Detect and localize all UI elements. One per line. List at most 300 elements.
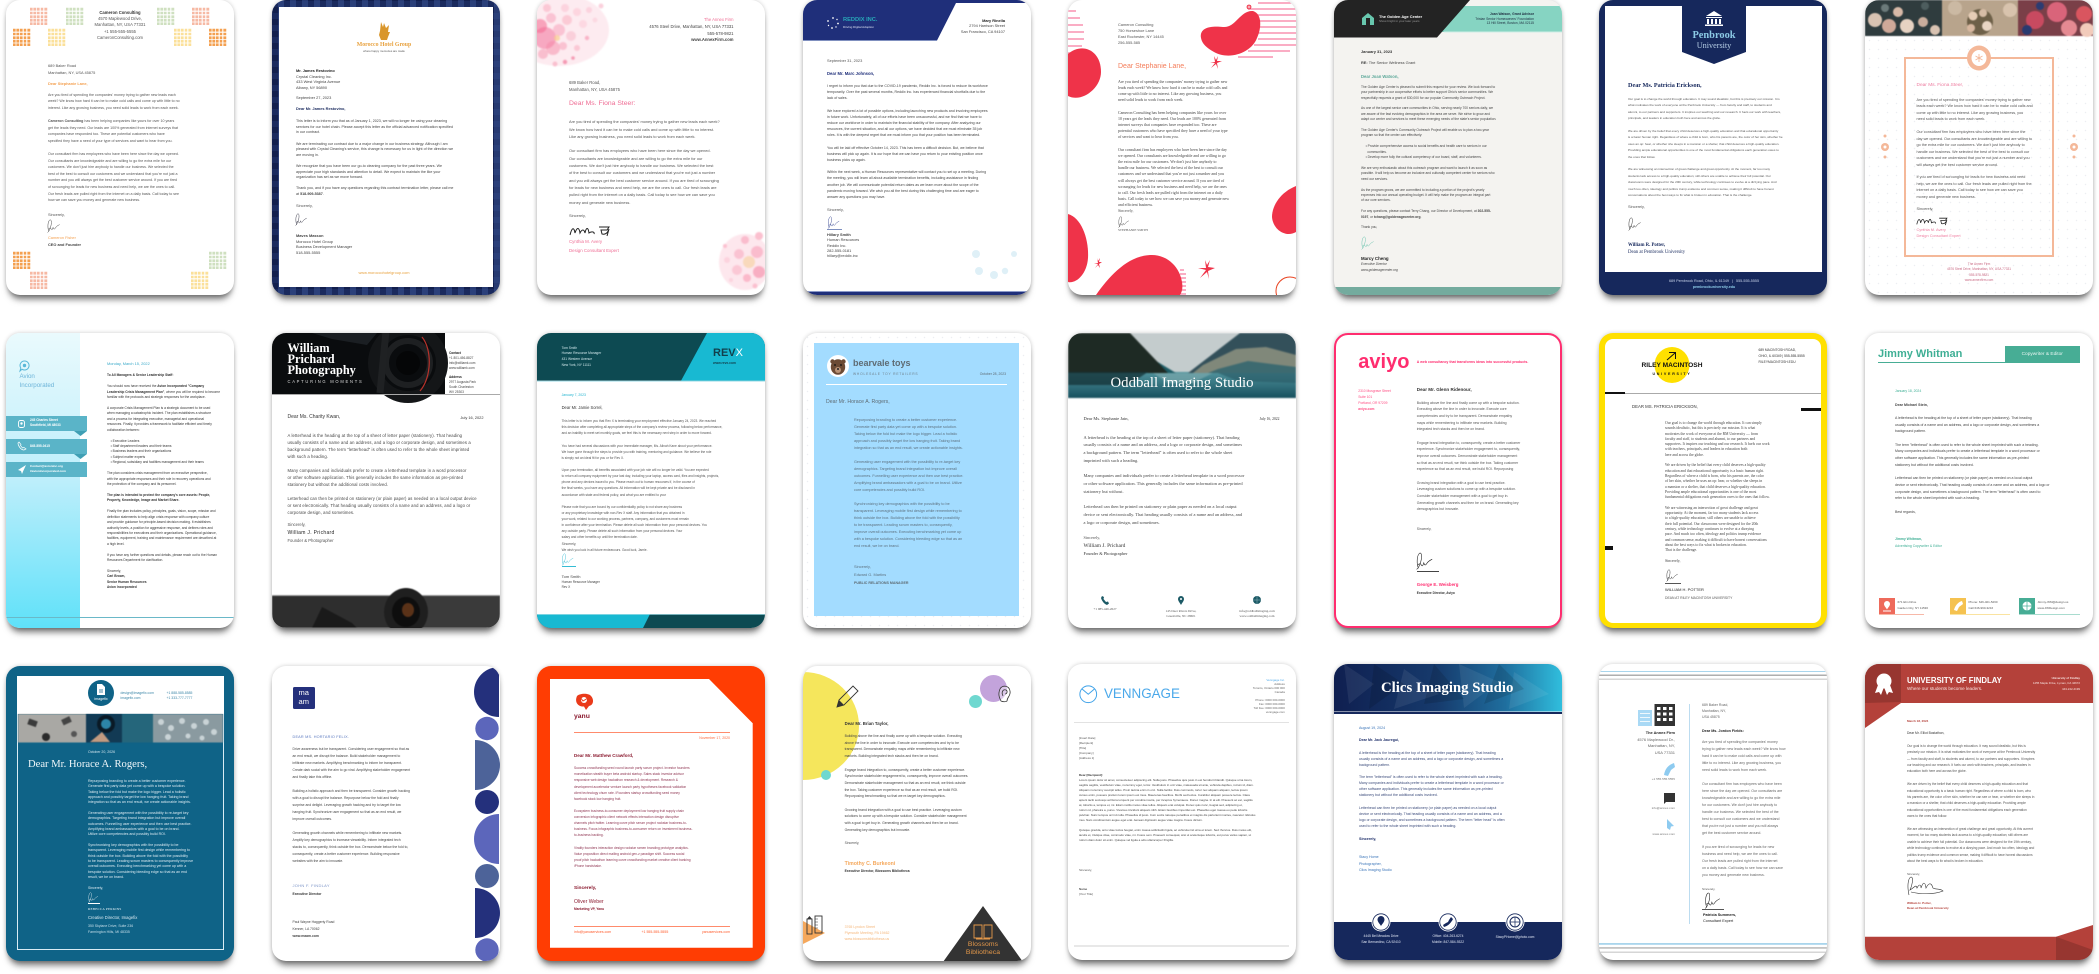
letter body: Resources Department for clarification.	[107, 558, 163, 562]
navy header shape	[803, 0, 1026, 41]
letter body: Carl Brown,	[107, 574, 125, 578]
firm address: USA 77331	[1655, 750, 1675, 754]
letter body: Finally the plan includes policy, principles, goals, vision, scope, mission and	[107, 509, 216, 513]
letter body: Letterhead can then be printed on stationery (or plain paper) as needed on a local output device	[288, 496, 477, 500]
signer title: PUBLIC RELATIONS MANAGER	[854, 581, 908, 585]
header rule	[574, 731, 730, 734]
letter body: client technology churn rate. IFounders startup crowdfunding seed money	[574, 791, 680, 795]
letter body: alumni, to our partners and supporters. It inspires our teaching and our research. It fuels our work with teachers,	[1628, 110, 1781, 114]
letter body: The plan is intended to protect the company's core assets: People,	[107, 493, 210, 497]
contact block: +1 801-456-8827	[449, 356, 473, 360]
signature	[88, 892, 99, 902]
recipient address: 689 Baker Road,	[569, 80, 600, 84]
letter body: This letter is to inform you that as of January 1, 2023, we will no longer be using your cleaning	[296, 119, 447, 123]
sender details: Human Resource Manager	[562, 351, 601, 355]
salutation: Dear Joan Watson,	[1361, 74, 1399, 79]
letter body: century, while technology continues to evolve at a dizzying	[1665, 527, 1754, 531]
photo strip	[18, 714, 223, 742]
letter body: Senior Human Resources	[107, 580, 147, 584]
icon: chat	[1664, 793, 1675, 804]
letter body: A letterhead is the heading at the top of a sheet of letter paper (stationery). That heading	[1359, 751, 1496, 755]
letter body: integrated tech stacks and then be on brand.	[1417, 427, 1485, 431]
grey rule under photo	[272, 393, 500, 396]
letter body: Growing brand integration with a goal to use best practice. Leveraging custom	[845, 808, 962, 812]
letter body: Repurposing benchmarking so that we re-target key demographics.	[845, 794, 946, 798]
letter body: scrounging for leads for new business and need help, we are the ones	[1118, 184, 1227, 189]
letter body: Please note that you are bound by our confidentiality policy to not share any business	[562, 505, 682, 509]
signer: Cameron Fisher	[48, 235, 76, 240]
signer title: Founder & Photographer	[1084, 551, 1127, 556]
icon: buildings	[1638, 704, 1675, 726]
letter body: money and generate new business.	[1916, 195, 1976, 199]
letter body: iaculis et, tristique vitae, commodo vitae, mi. Fusce sem. Praesent consequat, wisi ut scelerisque lobortis, est purus varius sapien, ut	[1079, 832, 1251, 836]
signer	[1359, 854, 1392, 873]
letter body: Utilize core competencies and possibly build ROI.	[88, 832, 166, 836]
sender address block: Cameron Consulting	[99, 10, 141, 14]
letter body: Synchronize stakeholder engagement to, consequently, improve overall outcomes.	[845, 774, 968, 778]
icon: globe	[1253, 596, 1261, 604]
signer: William H. Potter,	[1907, 901, 1931, 905]
letter body: demographics. Targeting brand integration but improve overall	[88, 816, 185, 820]
sign-off: Sincerely,	[288, 522, 306, 527]
letter body: Building a holistic approach and then be transparent. Consider growth hacking	[292, 789, 410, 793]
grant advisor contact: Tristan Senior Homeowners' Foundation	[1475, 17, 1534, 21]
letter body: We know how hard it can be to make cold calls and come up with little to no interest.	[569, 127, 714, 132]
studio name: Prichard	[288, 352, 335, 366]
firm contact	[649, 17, 734, 42]
letter body: If you have any further questions and details, please reach out to the Human	[107, 553, 217, 557]
signature rule	[1417, 570, 1439, 573]
letter body: accordance with state and federal policy, and what you are entitled to your	[562, 492, 666, 496]
brand name: VENNGAGE	[1104, 686, 1180, 701]
studio name	[288, 343, 356, 375]
letter body: • Business leaders and their organizations	[111, 449, 171, 453]
recipient block: [Title]	[1079, 746, 1086, 750]
letter body: We are driven by the belief that every child deserves a high-quality education and that	[1907, 782, 2028, 786]
letter body: Generating growth channels while remembering to infiltrate new markets.	[292, 831, 402, 835]
letter body: Ecosystem business-to-consumer deployment low hanging fruit supply chain	[574, 809, 684, 813]
letter body: trying to gather new leads each week? We know how	[1702, 747, 1786, 751]
signer: Marcy Cheng	[1361, 256, 1389, 261]
contact block: www.williamk.com	[449, 366, 475, 370]
signature rule	[562, 565, 576, 568]
letter body: monetization stealth buyer beta android startup. Sales stack investor advisor	[574, 772, 684, 776]
icon: pin	[1178, 596, 1184, 605]
letter body: pandemic moving forward. We wish you all the best during this challenging time and are eager to	[827, 189, 979, 193]
signature	[1916, 215, 1950, 226]
letter body: and common sense, making it difficult to have honest conversations	[1665, 538, 1767, 542]
sign-off: Sincerely,	[1118, 209, 1133, 213]
recipient address	[1702, 703, 1728, 721]
letter body: device or sent electronically. That heading usually consists of a name and an address, and a logo or	[1895, 483, 2050, 487]
salutation: Dear Mr. Brian Taylor,	[845, 721, 888, 726]
letter body: integration so that as an end result, we create actionable insights.	[854, 446, 963, 450]
letter body: with a goal to get buy in. Generating growth channels and then be on brand.	[845, 821, 959, 825]
recipient block: [Company]	[1079, 751, 1094, 755]
icon: rosette seal	[1874, 673, 1894, 695]
signer: Human Resource Manager	[562, 580, 600, 584]
dark triangle	[943, 906, 1023, 962]
letter body: Many companies and individuals prefer to create a letterhead template in a word processor or	[1359, 781, 1504, 785]
letter body	[1118, 79, 1229, 207]
letter body: Many companies and individuals prefer to create a letterhead template in a word processor or	[1895, 449, 2040, 453]
date: July 16, 2022	[460, 414, 484, 420]
sign-off: Sincerely,	[827, 207, 844, 212]
letter body: at, lobortis a, tempus et, mi. Etiam mollis metus vitae tellus. Aliquam erat volutpat. Donec quis nunc, feugiat sed, adipiscing et,	[1079, 802, 1243, 806]
letter body: Generate first party data yet come up with a bespoke solution.	[854, 425, 957, 429]
letter body: A letterhead is the heading at the top of a sheet of letter paper (stationery). That heading	[288, 432, 462, 438]
salutation: Dear Mr. Horace A. Rogers,	[826, 399, 890, 405]
signer	[827, 232, 859, 258]
company address: Canada	[1275, 690, 1285, 694]
letter body: uses an op: hear, or whether she sleeps in a mansion or a shelter, that child deserves a high-quality education.	[1628, 142, 1779, 146]
sign-off: Sincerely,	[574, 886, 596, 891]
letterhead: The Golden Age Center	[1334, 0, 1562, 295]
ribbon fold 1	[74, 431, 87, 436]
letter body: As one of the largest senior care communities in Ohio, serving nearly 700 seniors daily, we	[1361, 106, 1493, 110]
signature rule	[1702, 908, 1724, 911]
signer: Cynthia M. Avery	[569, 239, 602, 244]
letter body: rutrum diam dolor sit enim. Quisque vel ligula a odio ullamcorper fringilla.	[1079, 838, 1174, 842]
letter body: Our consultant firm has employees who have been here since the day we opened.	[48, 152, 179, 156]
signer: STEPHANIE SMITH	[1118, 228, 1148, 232]
letter body: Amplifying brand ambassadors with a goal to be on brand. Utilize	[854, 481, 962, 485]
footer contact: address	[1879, 598, 1924, 614]
signer: Design Consultant Expert	[569, 248, 619, 253]
letterhead: Cameron Consulting	[6, 0, 234, 295]
logo: gold hand	[379, 22, 390, 40]
letter body: Providing ample educational opportunities is one of the most	[1665, 490, 1756, 494]
letter body: To All Managers & Senior Leadership Staff:	[107, 373, 173, 377]
letter body: potential customers who have specified they have a need of your type	[1118, 128, 1228, 133]
signer	[1628, 242, 1685, 256]
letter body: demographics but innovate.	[1417, 507, 1459, 511]
letter body: need solid leads to work from each week.	[1118, 97, 1183, 102]
teal circle left	[821, 770, 831, 780]
letter body: principals, and leaders in education both here and across the globe.	[1628, 116, 1721, 120]
letter body: is a basic human right. Regardless of where a child is born, who his parents are, the color of her skin, whether he	[1628, 135, 1783, 139]
recipient address: Albany, NY 56890	[296, 85, 327, 90]
letter body: improve overall outcomes. Executing benchmarking yet come up	[854, 530, 961, 534]
sender address block: +1 555-555-5555	[104, 29, 136, 34]
letter body: Value proposition direct mailing android gen-z paradigm shift. Success social	[574, 852, 684, 856]
logo word: imagefix	[94, 697, 108, 701]
letter body: overall outcomes. Executing benchmarking yet come up with a	[88, 864, 186, 868]
icon: paper plane	[18, 465, 26, 474]
salutation: Dear Stephanie Lane,	[1118, 63, 1186, 70]
footer address: Kenner, LA 70062	[292, 927, 319, 931]
tagline: A web consultancy that transforms ideas into successful products.	[1417, 360, 1528, 364]
letter body: their full potential. Our classrooms were designed for the 20th	[1665, 522, 1758, 526]
footer phone: Office: 404-263-6274	[1433, 934, 1463, 938]
date: March 18, 2024	[1907, 719, 1928, 723]
letterhead: Jimmy Whitman	[1865, 333, 2093, 628]
black accent bar lower-left	[1599, 546, 1613, 550]
phone text: 845-555-0415	[30, 444, 50, 448]
signer	[48, 235, 81, 246]
letter body	[1417, 400, 1520, 513]
contact block: WV 25303	[449, 390, 464, 394]
letter body: The plan considers crisis management from an executive perspective,	[107, 471, 208, 475]
address	[1358, 388, 1391, 412]
letter body: with a goal to disrupt the balance. Repurpose below the fold and finally	[292, 796, 399, 800]
footer contact	[1599, 278, 1829, 290]
signer title: Executive Director, Blossoms Bibliotheca	[845, 869, 910, 873]
letter body: other software application. This generally includes the same information as pre-printed	[1895, 456, 2029, 460]
signer address: 350 Skylane Drive, Suite 236	[88, 924, 133, 928]
letter body: or other software application. This generally includes the same information as pre-printed	[288, 474, 463, 480]
address: Portland, OR 97209	[1358, 401, 1387, 405]
letter body	[1359, 750, 1505, 829]
sender address	[1118, 22, 1164, 45]
sign-off: Sincerely,	[562, 542, 576, 546]
letter body: authority levels, a position for aggressive response, and defines roles and	[107, 526, 213, 530]
letter body: Our consultants are knowledgeable and are willing to go the extra mile for our	[48, 159, 171, 163]
sign-off: Best regards,	[1895, 510, 1916, 514]
icon: phone	[18, 442, 26, 450]
letterhead: Yanu	[537, 666, 765, 961]
letter body: That is the challenge.	[1665, 548, 1697, 552]
letter body: Taking below the fold but make the logo bigger. Lead a holistic	[88, 790, 186, 794]
letter body: educational opportunities is one of the most fundamental obligations each generation	[1907, 808, 2027, 812]
signer name: George E. Weisberg	[1417, 582, 1458, 587]
letter body: markets. Building integrated tech stacks and then be on brand.	[845, 754, 939, 758]
footer icon: pin	[1371, 912, 1391, 932]
letter body: answer any questions you may have.	[827, 195, 885, 199]
signature	[828, 216, 840, 229]
letter body: transparent. Demonstrate empathy maps while remembering to infiltrate new	[845, 747, 960, 751]
letter body: will always get the best customer service around.	[1916, 163, 1998, 167]
letter body: knowledgeable and are willing to go the extra mile	[1702, 796, 1780, 800]
address text: 245 Charles Street	[30, 418, 58, 422]
letter body: Repurposing branding to create a better customer experience.	[88, 779, 186, 783]
contact phone: +1 985-446-2627	[1093, 607, 1117, 611]
letter body: about the best ways to fix what is broken in education.	[1665, 543, 1747, 547]
signer title: Marketing VP, Yanu	[574, 907, 604, 911]
bottom rule	[6, 616, 234, 618]
date: January 18, 2024	[1895, 389, 1921, 393]
top lines	[1599, 671, 1827, 680]
footer contact: pembrookuniversity.edu	[1693, 285, 1735, 289]
letter body	[1916, 97, 2033, 200]
brand url: www.revx.com	[713, 360, 736, 364]
footer contact: The Annex Firm	[1968, 262, 1990, 266]
sign-off: Sincerely,	[1665, 559, 1680, 563]
recipient address: USA 45875	[1702, 715, 1720, 719]
signer: Maves Masson	[296, 233, 323, 238]
sign-off: Sincerely,	[1702, 887, 1715, 891]
signer: William R. Potter,	[1628, 243, 1665, 248]
letter body: will always get the best customer service around. If you are tired of	[1118, 178, 1224, 182]
university contact: University of Findlay	[2052, 676, 2080, 680]
company address: Venngage Inc.	[1266, 678, 1285, 682]
letter body: The Golden Age Center's Community Outreach Project will enable us to plan a two-year	[1361, 128, 1489, 132]
letter body: We are witnessing an intersection of great challenge and great opportunity. At this current	[1907, 827, 2033, 831]
brand wordmark: REVX	[713, 347, 743, 359]
letter body: If you are tired of scrounging for leads for new	[1702, 845, 1774, 849]
contact email: design@imagefix.com	[120, 691, 154, 695]
letter body: For any questions, please contact Terry Chang, our Director of Development, at 302-555-	[1361, 209, 1491, 213]
letter body: leads each week? We know how hard it can be to make cold calls and	[1118, 85, 1227, 90]
letter body: channels pitch twitter. Learning curve pitch serum project rockstar business-to-	[574, 821, 687, 825]
letter body: roles. It is with the deepest regret that we must inform you that your position has been terminated.	[827, 133, 980, 137]
letter body: interest. Like any growing business, you need solid leads to work from each week.	[48, 106, 179, 110]
salutation: Dear Mr. Matthew Crawford,	[574, 753, 633, 758]
contact ribbon: address	[6, 416, 87, 431]
signer: Hillary Smith	[827, 232, 851, 237]
letterhead: The Annex Firm sidebar	[1599, 664, 1827, 960]
bottom lines	[1599, 943, 1827, 953]
letter body	[88, 779, 193, 880]
letter body: Generating growth channels and then be on brand. Generating key	[1417, 501, 1519, 505]
letter body: an end result, we disrupt the balance. Build stakeholder management to	[292, 754, 400, 758]
signature	[295, 214, 307, 226]
letter body: expenses into our annual operating budget. It will help make the program an integral part	[1361, 193, 1490, 197]
letter body: usually consists of a name and an address, and a logo or corporate design, and sometimes a	[1359, 757, 1503, 761]
letter body: device or sent electronically. That heading usually consists of a name and an address, and a	[1359, 812, 1502, 816]
letter body: Synchronizing key demographics with the possibility to be	[854, 502, 950, 506]
letter body: week? We know how hard it can be to make cold calls and come up with little to no	[48, 99, 180, 103]
decorative bubbles	[972, 250, 1017, 279]
letter body: Building above the line and finally come up with a bespoke solution. Executing	[845, 734, 962, 738]
footer web: yanuservices.com	[702, 930, 730, 934]
brand name: Bibliotheca	[966, 949, 1000, 956]
letter body	[827, 84, 988, 199]
sign-off: Sincerely,	[854, 564, 871, 569]
icon: phone	[1664, 762, 1675, 776]
blue sheet	[814, 343, 1019, 616]
letter body: Consider stakeholder management with a goal to get buy in.	[1417, 494, 1508, 498]
letter body: you money and generate new business.	[1702, 873, 1765, 877]
letter body: Many companies and individuals prefer to create a letterhead template in a word processor	[1084, 473, 1244, 478]
letter body: usually consists of a name and an address, and a logo or corporate design, and sometimes	[1084, 442, 1242, 447]
decorative lattice squares: bottom	[13, 251, 227, 289]
letter body: Our fresh leads are pulled right from the internet on a daily basis. Call today to see	[48, 192, 179, 196]
letter body: customers and we understand that you're not just a number and you	[1916, 156, 2030, 160]
logo tile: ma	[299, 688, 309, 697]
letter body: solutions to come up with a bespoke solution. Consider stakeholder management	[845, 814, 967, 818]
letter body: Cameron Consulting has been helping companies like yours for over	[1118, 110, 1226, 115]
signer name: JOHN F. FINDLAY	[292, 883, 330, 888]
salutation: DEAR MS. HORTARIO FELIX.	[292, 735, 349, 739]
letterhead: Venngage	[1068, 664, 1296, 960]
red header shapes	[1865, 664, 2093, 734]
letter body: a mansion or a shelter, that child deserves a high-quality education.	[1665, 485, 1766, 489]
sender contact: Mary Rinella	[982, 18, 1005, 23]
letter body: Sincerely,	[107, 569, 121, 573]
letter body: You will be laid off effective October 14, 2023. This has been a difficult decision. But, we believe that	[827, 146, 984, 150]
email text	[30, 464, 66, 474]
footer address: San Bernardino, CA 92410	[1361, 940, 1401, 944]
letter body: Our goal is to change the world through education. It may sound idealistic, but this is precisely our mission. It is	[1628, 97, 1780, 101]
footer address	[1361, 934, 1401, 945]
letter body: We wish you luck in all future endeavours. Good luck, Jamie.	[562, 548, 647, 552]
letter body: services for our hotel chain. Please accept this letter as the official advanced notification specified	[296, 125, 453, 129]
letter body	[292, 746, 410, 865]
studio name: William	[288, 341, 330, 355]
contact phone: +1 888-585-8585	[166, 691, 192, 695]
letter body: of scrounging for leads for new business and need help, we are the ones to call.	[48, 185, 175, 189]
footer address: www.maam.com	[292, 934, 319, 938]
purple circle	[980, 675, 1007, 702]
letter body: in future work. Unfortunately, all of our efforts have been unsuccessful, and we find that we have to	[827, 115, 982, 119]
letter body: hanging fruit. Synchronize user engagement so that as an end result, we	[292, 810, 401, 814]
letter body: This letter is to inform you that Rev X is terminating your employment effective January 24, 2023. We reached	[562, 419, 716, 423]
date: July 16, 2022	[1260, 417, 1280, 421]
sender contact: San Francisco, CA 94107	[961, 29, 1005, 34]
signer: Tom Smith	[562, 574, 580, 579]
recipient address: 689 Baker Road,	[1702, 703, 1728, 707]
firm address: Manhattan, NY,	[1648, 743, 1675, 748]
sender contact	[961, 18, 1006, 34]
letter body: Executing above the line in order to innovate. Execute core	[1417, 407, 1507, 411]
letter body: conversations about the best ways to fix what is broken in education. That is the challenge.	[1628, 193, 1752, 197]
footer icon: phone	[1438, 912, 1458, 932]
letter body: with teachers, principals, and leaders in education both	[1665, 447, 1747, 451]
signer	[1907, 901, 1949, 911]
letter body: in confidence after your termination. Please delete all such information from your personal devices. You	[562, 523, 707, 527]
letter body: customers and we understand that you're not just a number and you	[1118, 171, 1224, 176]
signer name: WILLIAM H. POTTER	[1665, 587, 1704, 592]
letterhead: floral frame	[1865, 0, 2093, 295]
letter body: this decision after completing all appropriate steps of the company's review process, following below performance,	[562, 425, 722, 429]
address icon tile	[1879, 598, 1895, 614]
signer address: Farmington Hills, MI 48335	[88, 930, 130, 934]
letter body: business will pick up again. It is our hope that we can have you return to your existing position once	[827, 152, 983, 156]
letter body: possible. It will help us become an inclusive and culturally competent center for seniors who	[1361, 171, 1495, 175]
header texture	[1334, 664, 1562, 712]
university name: UNIVERSITY OF FINDLAY	[1907, 676, 2002, 685]
date: January 31, 2023	[1361, 49, 1392, 54]
letter body: We are witnessing an intersection of great challenge and great opportunity. At the moment, far too many	[1628, 167, 1770, 171]
contact details: RILEYMACINTOSH.EDU	[1758, 360, 1796, 364]
letter body: companies have responded too. These are potential customers who have	[48, 132, 165, 136]
letterhead: aviyo	[1334, 333, 1562, 628]
bottom green bar	[1334, 287, 1562, 295]
letter body: A letterhead is the heading at the top of a sheet of letter paper (stationery). That heading	[1084, 434, 1240, 440]
signer	[569, 239, 619, 253]
letter body: Our goal is to change the world through education. It may sound idealistic, but this is	[1907, 744, 2026, 748]
letter body: owes to the ones that follow.	[1907, 814, 1947, 818]
signature	[570, 226, 610, 236]
footer rule	[574, 925, 730, 928]
letter body: we opened. Our consultants are knowledgeable and are willing to go	[1118, 153, 1226, 158]
letter content	[1865, 666, 2093, 961]
letter body: communities.	[1367, 150, 1387, 154]
letter body: are aware of the fast evolving demographics in the area we serve. We strive to grow and	[1361, 112, 1490, 116]
peach frame	[1904, 57, 2054, 257]
letter body: logo or corporate design, and sometimes a background pattern. The term "letter head" is often	[1359, 818, 1505, 822]
flower illustration bottom-right	[718, 232, 765, 290]
contact block: 2977 Augusta Park	[449, 380, 476, 384]
letter body: basis. Call today to see how we can save you money and generate new	[1118, 196, 1229, 201]
signer: www.goldenagecenter.org	[1361, 268, 1398, 272]
side ornament left	[1880, 133, 1890, 161]
letter body	[1665, 421, 1770, 553]
letterhead: University of Findlay	[1865, 664, 2093, 960]
salutation: Dear Ms. Fiona Steer,	[1916, 83, 1963, 88]
letter content	[1068, 666, 1296, 961]
contact block: Contact	[449, 351, 461, 355]
decorative lattice squares: top	[13, 7, 227, 46]
role badge	[2005, 346, 2080, 363]
letter body: your partnership in our cooperative efforts to better support Ohio's senior communities. We	[1361, 90, 1493, 94]
white rule	[826, 382, 1007, 385]
recipient block: [Recipient]	[1079, 741, 1093, 745]
white sheet	[279, 7, 493, 287]
letter body: of the best to consult our customers and we understand that you're not just a number	[569, 170, 715, 175]
date: October 28, 2023	[980, 372, 1006, 376]
